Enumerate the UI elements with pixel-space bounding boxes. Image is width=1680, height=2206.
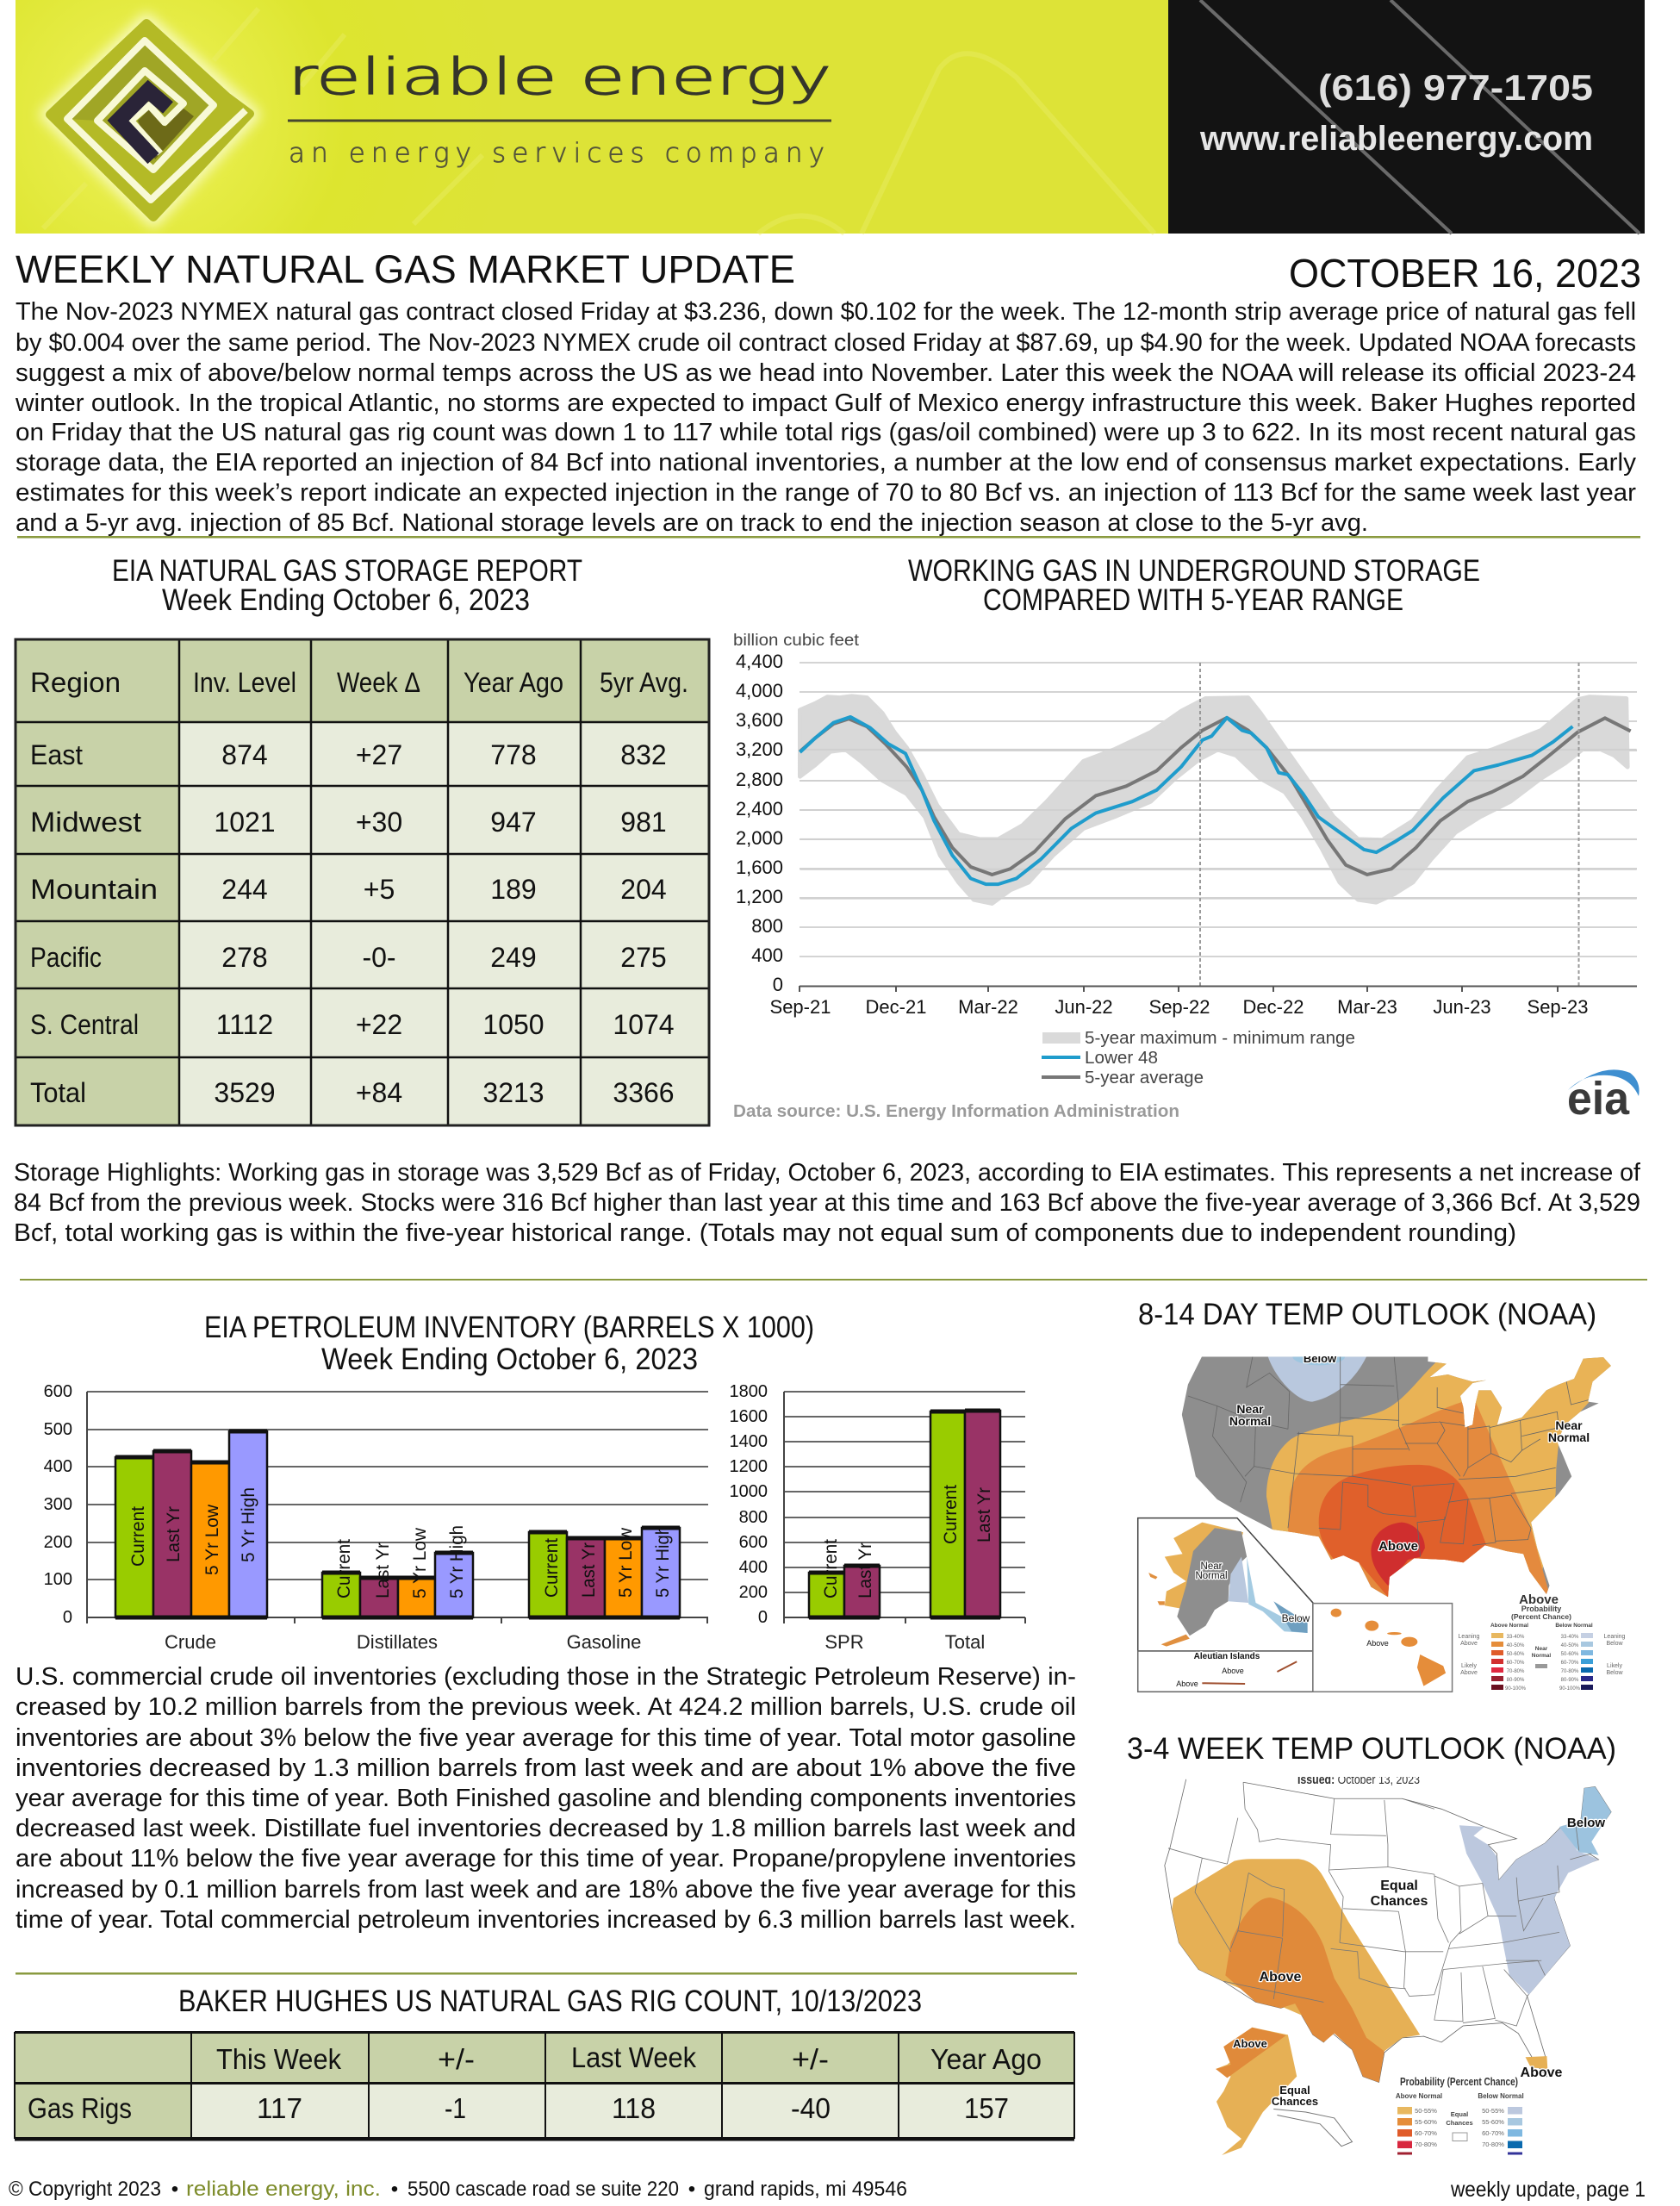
storage table: 832 [620, 739, 667, 770]
map legend: 70-80% [1415, 2141, 1437, 2148]
heading: working gas chart: COMPARED WITH 5-YEAR RANGE [983, 583, 1403, 617]
map legend: 50-55% [1482, 2107, 1504, 2115]
y axis labels: 100 [44, 1570, 72, 1589]
footer: page label: weekly update, page 1 [1450, 2178, 1646, 2202]
map legend: 80-90% [1507, 1678, 1525, 1683]
map labels: Above [1378, 1539, 1418, 1554]
bar labels: Current [821, 1539, 841, 1598]
rig count table: +/- [792, 2043, 829, 2075]
map legend: Below [1606, 1641, 1623, 1647]
map legend: Above [1460, 1641, 1478, 1647]
chart: x axis labels: Sep-21 [770, 996, 831, 1018]
chart: y axis labels: 1,600 [736, 857, 783, 878]
footer: address line: reliable energy, inc. [186, 2178, 381, 2201]
petroleum commentary text block: time of year. Total commercial petroleum inventories increased by 6.3 million barrels last week. [16, 1906, 1076, 1934]
chart: y axis labels: 2,400 [736, 798, 783, 819]
map legend: Above [1460, 1670, 1478, 1676]
storage table: 1050 [482, 1009, 544, 1040]
chart: x axis labels: Dec-21 [866, 996, 926, 1018]
chart: x axis labels: Jun-23 [1433, 996, 1491, 1018]
category labels: SPR [824, 1631, 864, 1653]
banner: black contact panel [1168, 0, 1645, 234]
rig count table: 157 [964, 2092, 1009, 2124]
bar labels: 5 Yr Low [202, 1504, 222, 1575]
storage table: Midwest [30, 807, 141, 838]
map legend: Likely [1461, 1663, 1477, 1669]
storage table: +5 [364, 874, 395, 905]
map legend: 55-60% [1482, 2118, 1504, 2126]
heading: storage report: EIA NATURAL GAS STORAGE REPORT [112, 554, 582, 588]
y axis labels: 0 [758, 1608, 768, 1627]
icon: reliable energy spiral logo [46, 19, 254, 221]
storage table: 204 [620, 874, 667, 905]
chart: x axis labels [770, 996, 1588, 1018]
market summary text block: by $0.004 over the same period. The Nov-2023 NYMEX crude oil contract closed Friday at $87.69, up $4.90 for the week. Updated NOAA forecasts [16, 329, 1636, 357]
storage table: -0- [362, 942, 396, 973]
y axis labels: 1600 [729, 1407, 768, 1426]
y axis labels: 600 [739, 1533, 768, 1552]
y axis labels: 1400 [729, 1432, 768, 1451]
map legend: 40-50% [1507, 1643, 1525, 1648]
heading: working gas chart: WORKING GAS IN UNDERGROUND STORAGE [908, 554, 1480, 588]
map: continental US zones [1182, 1356, 1611, 1598]
storage table: 5yr Avg. [600, 667, 688, 698]
heading: storage report [112, 554, 582, 617]
map legend: Below Normal [1478, 2092, 1524, 2100]
y axis labels [729, 1382, 768, 1627]
chart: y axis labels: 400 [751, 944, 783, 966]
category labels [824, 1631, 985, 1653]
footer: address line: © Copyright 2023 [9, 2178, 161, 2201]
map legend: Chances [1446, 2119, 1473, 2127]
map: Hawaii inset [1313, 1604, 1453, 1692]
website: www.reliableenergy.com [1199, 120, 1593, 158]
y axis labels: 1000 [729, 1482, 768, 1501]
storage table: +22 [356, 1009, 402, 1040]
storage table: Region [30, 667, 121, 698]
storage table: +30 [356, 807, 402, 838]
map labels: Equal [1279, 2084, 1310, 2097]
phone number: (616) 977-1705 [1318, 67, 1593, 108]
storage highlights text block: 84 Bcf from the previous week. Stocks were 316 Bcf higher than last year at this time and 163 Bcf above the five-year average of 3,366 Bcf. At 3,529 [14, 1189, 1640, 1217]
rig count table [15, 2031, 1074, 2141]
y axis labels: 600 [44, 1382, 72, 1401]
bar labels: 5 Yr Low [616, 1527, 636, 1598]
footer: address line: grand rapids, mi 49546 [704, 2178, 907, 2201]
heading: petroleum inventory [204, 1311, 814, 1376]
petroleum commentary text block: creased by 10.2 million barrels from the previous week. At 424.2 million barrels, U.S. crude oil [16, 1693, 1076, 1721]
y axis labels: 800 [739, 1508, 768, 1527]
chart: unit label: billion cubic feet [733, 632, 860, 650]
map labels: Below [1567, 1816, 1605, 1830]
map legend: Leaning [1604, 1634, 1626, 1640]
bar chart: petroleum inventory left [44, 1382, 708, 1653]
y axis labels: 400 [739, 1558, 768, 1577]
market summary text block: estimates for this week’s report indicate an expected injection in the range of 70 to 80 Bcf vs. an injection of 113 Bcf for the same week last year [16, 479, 1636, 507]
map: Aleutian inset [1138, 1651, 1313, 1692]
y axis labels: 300 [44, 1495, 72, 1514]
chart: legend: 5-year average [1085, 1069, 1204, 1087]
bar labels [128, 1487, 673, 1598]
map legend: 70-80% [1561, 1669, 1579, 1674]
rig count table: +/- [438, 2043, 475, 2075]
bar chart: petroleum inventory right [729, 1382, 1025, 1653]
bar labels: 5 Yr Low [410, 1527, 430, 1598]
storage table: 981 [620, 807, 667, 838]
line chart: working gas in storage [733, 632, 1640, 1125]
y axis labels: 200 [44, 1533, 72, 1552]
map: continental US zones [1165, 1779, 1611, 2155]
storage table: 874 [221, 739, 268, 770]
market summary text block: on Friday that the US natural gas rig count was down 1 to 117 while total rigs (gas/oil combined) were up 3 to 622. In its most recent natural gas [16, 419, 1636, 446]
storage table: 275 [620, 942, 667, 973]
banner: yellow-green panel [16, 0, 1168, 234]
map: Alaska inset [1138, 1518, 1313, 1651]
map legend: Equal [1451, 2110, 1468, 2118]
y axis labels: 0 [63, 1608, 72, 1627]
map legend: 60-70% [1561, 1661, 1579, 1666]
map: insets [1138, 1518, 1453, 1692]
map legend: Probability [1521, 1605, 1561, 1613]
map legend [1396, 2076, 1524, 2154]
map legend: 90-100% [1559, 1686, 1581, 1692]
storage table [16, 639, 709, 1125]
bar labels: 5 Yr High [653, 1525, 673, 1598]
map legend: Likely [1607, 1663, 1622, 1669]
title: WEEKLY NATURAL GAS MARKET UPDATE [16, 247, 795, 291]
storage table: 249 [490, 942, 537, 973]
category labels: Gasoline [567, 1631, 641, 1653]
map labels: Normal [1195, 1571, 1228, 1581]
storage table: S. Central [30, 1009, 139, 1040]
map legend: 70-80% [1482, 2141, 1504, 2148]
storage table: +27 [356, 739, 402, 770]
footer: address line: • [391, 2178, 398, 2201]
y axis labels: 200 [739, 1583, 768, 1602]
storage table: 3366 [613, 1077, 675, 1108]
map labels: Above [1222, 1667, 1244, 1675]
storage highlights text block: Storage Highlights: Working gas in storage was 3,529 Bcf as of Friday, October 6, 2023, according to EIA estimates. This represents a net increase of [14, 1159, 1641, 1187]
rig count table: 117 [257, 2092, 302, 2124]
storage table: East [30, 739, 83, 770]
storage table: 3529 [214, 1077, 276, 1108]
storage highlights text block: Bcf, total working gas is within the five-year historical range. (Totals may not equal sum of components due to independent rounding) [14, 1219, 1516, 1247]
market summary text block: storage data, the EIA reported an injection of 84 Bcf into national inventories, a number at the low end of consensus market expectations. Early [16, 449, 1637, 477]
y axis labels: 1800 [729, 1382, 768, 1401]
bars: crude [115, 1431, 267, 1617]
map labels: Above [1260, 1970, 1302, 1985]
map: 8-14 day temperature outlook [1138, 1348, 1629, 1692]
chart: x axis labels: Sep-22 [1149, 996, 1210, 1018]
footer: address line: 5500 cascade road se suite 220 [408, 2178, 679, 2201]
chart: data curves [800, 696, 1637, 903]
rig count table: Last Week [571, 2041, 696, 2073]
chart: y axis labels: 4,000 [736, 680, 783, 701]
map legend: 33-40% [1561, 1635, 1579, 1640]
map legend: Above Normal [1396, 2092, 1442, 2100]
petroleum commentary text block: inventories decreased by 1.3 million barrels from last week and are about 1% above the five [16, 1754, 1076, 1782]
market summary text block: winter outlook. In the tropical Atlantic, no storms are expected to impact Gulf of Mexico energy infrastructure this week. Baker Hughes reported [15, 389, 1636, 417]
map: 3-4 week temperature outlook [1165, 1773, 1611, 2155]
storage table: Total [30, 1077, 86, 1108]
map labels: Above [1521, 2066, 1563, 2080]
chart: y axis labels: 4,400 [736, 651, 783, 672]
storage table: Inv. Level [193, 667, 296, 698]
map labels: Below [1304, 1352, 1337, 1365]
map legend: Near [1535, 1646, 1548, 1652]
map legend: 40-50% [1561, 1643, 1579, 1648]
heading: 3-4 week outlook: 3-4 WEEK TEMP OUTLOOK (NOAA) [1127, 1732, 1616, 1766]
heading: rig count: BAKER HUGHES US NATURAL GAS RIG COUNT, 10/13/2023 [178, 1985, 922, 2018]
storage table: 189 [490, 874, 537, 905]
petroleum commentary text block: are about 11% below the five year average for this time of year. Propane/propylene inventories [16, 1845, 1076, 1873]
y axis labels [44, 1382, 72, 1627]
heading: 8-14 day outlook: 8-14 DAY TEMP OUTLOOK (NOAA) [1138, 1298, 1596, 1331]
market summary text block: and a 5-yr avg. injection of 85 Bcf. National storage levels are on track to end the injection season at close to the 5-yr avg. [16, 509, 1368, 537]
category labels: Distillates [357, 1631, 438, 1653]
map labels: Above [1176, 1679, 1198, 1688]
bars: distillates [322, 1553, 473, 1617]
map legend: Leaning [1459, 1634, 1480, 1640]
storage table: 1112 [216, 1009, 273, 1040]
rig count table: -40 [791, 2092, 831, 2124]
chart: y axis labels: 0 [773, 974, 783, 995]
bar labels: 5 Yr High [239, 1487, 258, 1562]
chart: y axis labels: 3,200 [736, 738, 783, 760]
map legend: 60-70% [1482, 2129, 1504, 2137]
map labels: Chances [1272, 2095, 1318, 2108]
map legend: 70-80% [1507, 1669, 1525, 1674]
map labels: Near [1201, 1561, 1223, 1572]
bar labels: Current [542, 1538, 562, 1598]
rig count table: 118 [612, 2092, 656, 2124]
storage table: Week Δ [337, 667, 420, 698]
chart: y axis labels: 800 [751, 915, 783, 937]
heading: petroleum inventory: EIA PETROLEUM INVENTORY (BARRELS X 1000) [204, 1311, 814, 1344]
date: OCTOBER 16, 2023 [1289, 251, 1641, 296]
map legend [1459, 1592, 1626, 1692]
bar labels: Current [128, 1506, 148, 1567]
rig count table: Gas Rigs [28, 2092, 132, 2124]
bar labels: 5 Yr High [447, 1525, 467, 1598]
map legend: 33-40% [1507, 1635, 1525, 1640]
footer: address line [9, 2178, 907, 2201]
map labels [1233, 1816, 1605, 2108]
map legend: Normal [1532, 1653, 1551, 1659]
chart: data source: Data source: U.S. Energy Information Administration [733, 1102, 1179, 1121]
petroleum commentary text block: year average for this time of year. Both Finished gasoline and blending components inventories [16, 1785, 1076, 1812]
storage table: 278 [221, 942, 268, 973]
petroleum commentary text block: inventories are about 3% below the five year average for this time of year. Total motor gasoline [16, 1724, 1076, 1752]
storage table: 947 [490, 807, 537, 838]
map labels: Normal [1229, 1414, 1271, 1428]
chart: legend [1042, 1029, 1355, 1087]
bar labels [821, 1485, 994, 1598]
chart: y axis labels: 1,200 [736, 886, 783, 907]
map legend: Above [1519, 1592, 1559, 1607]
chart: x axis labels: Jun-22 [1055, 996, 1113, 1018]
bar labels: Last Yr [974, 1487, 994, 1542]
storage table: 1074 [613, 1009, 675, 1040]
chart: x axis labels: Mar-23 [1337, 996, 1397, 1018]
bar labels: Last Yr [579, 1542, 599, 1598]
map labels: Near [1236, 1402, 1264, 1416]
map labels: Above [1233, 2037, 1267, 2050]
category labels [165, 1631, 641, 1653]
chart: x axis labels: Mar-22 [958, 996, 1018, 1018]
map legend: 50-55% [1415, 2107, 1437, 2115]
icon: eia logo: eia [1567, 1073, 1630, 1125]
storage table: 1021 [214, 807, 276, 838]
chart: y axis labels: 2,000 [736, 827, 783, 849]
y axis labels: 1200 [729, 1457, 768, 1476]
petroleum commentary text block: U.S. commercial crude oil inventories (excluding those in the Strategic Petroleum Reserve) in- [16, 1663, 1076, 1691]
tagline: an energy services company [289, 138, 824, 169]
market summary text block: suggest a mix of above/below normal temps across the US as we head into November. Later this week the NOAA will release its official 2023-24 [16, 359, 1636, 387]
storage table: Mountain [30, 874, 158, 905]
storage table: 778 [490, 739, 537, 770]
storage table: 244 [221, 874, 268, 905]
chart: y axis labels: 3,600 [736, 709, 783, 731]
map legend: Probability (Percent Chance) [1400, 2076, 1518, 2088]
storage table: 3213 [482, 1077, 544, 1108]
bars: SPR and total [809, 1411, 1000, 1617]
category labels: Crude [165, 1631, 216, 1653]
petroleum commentary text block: increased by 0.1 million barrels from last week and are 18% above the five year average for this [16, 1876, 1076, 1904]
bars: gasoline [529, 1528, 680, 1617]
storage table: Year Ago [464, 667, 563, 698]
chart: legend: 5-year maximum - minimum range [1085, 1029, 1355, 1048]
heading: storage report: Week Ending October 6, 2023 [162, 583, 530, 617]
bar labels: Current [334, 1539, 354, 1598]
chart: x axis labels: Dec-22 [1243, 996, 1304, 1018]
map legend: 55-60% [1415, 2118, 1437, 2126]
bar labels: Last Yr [856, 1542, 875, 1598]
bar labels: Last Yr [164, 1506, 184, 1562]
chart: legend: Lower 48 [1085, 1049, 1158, 1068]
company name: reliable energy [288, 47, 831, 106]
market summary text block [15, 298, 1637, 537]
storage table: Pacific [30, 942, 102, 973]
map legend: (Percent Chance) [1511, 1612, 1571, 1621]
bar labels: Last Yr [373, 1542, 393, 1598]
rig count table: This Week [216, 2043, 341, 2075]
storage table: +84 [356, 1077, 402, 1108]
map labels: Below [1282, 1612, 1310, 1624]
category labels: Total [945, 1631, 985, 1653]
chart: x axis labels: Sep-23 [1528, 996, 1588, 1018]
map legend: 50-60% [1561, 1652, 1579, 1657]
chart: y axis labels: 2,800 [736, 769, 783, 790]
map legend: 50-60% [1507, 1652, 1525, 1657]
footer: address line: • [171, 2178, 178, 2201]
rig count table: -1 [445, 2092, 466, 2124]
rig count table: Year Ago [930, 2043, 1042, 2075]
heading: petroleum inventory: Week Ending October 6, 2023 [321, 1343, 698, 1376]
y axis labels: 400 [44, 1457, 72, 1476]
market summary text block: The Nov-2023 NYMEX natural gas contract closed Friday at $3.236, down $0.102 for the week. The 12-month strip average price of natural gas fell [16, 298, 1636, 326]
footer: address line: • [688, 2178, 695, 2201]
map legend: 60-70% [1415, 2129, 1437, 2137]
map legend: 60-70% [1507, 1661, 1525, 1666]
petroleum commentary text block: decreased last week. Distillate fuel inventories decreased by 1.8 million barrels last week and [16, 1815, 1076, 1842]
map legend: Above Normal [1490, 1623, 1528, 1629]
chart: y axis labels [736, 651, 783, 995]
map labels: Chances [1371, 1894, 1428, 1909]
map labels: Normal [1548, 1430, 1590, 1444]
petroleum commentary text block [16, 1663, 1076, 1934]
map: Alaska [1216, 2028, 1297, 2155]
map legend: Below Normal [1555, 1623, 1593, 1629]
map legend: 80-90% [1561, 1678, 1579, 1683]
storage highlights text block [14, 1159, 1641, 1247]
map labels [1176, 1352, 1590, 1688]
heading: working gas chart [908, 554, 1480, 617]
map labels: Aleutian Islands [1194, 1652, 1260, 1661]
header banner [16, 0, 1645, 234]
y axis labels: 500 [44, 1420, 72, 1439]
map: issue date: Issued: October 13, 2023 [1297, 1773, 1420, 1787]
map labels: Above [1366, 1639, 1389, 1648]
map labels: Equal [1380, 1879, 1418, 1893]
map labels: Near [1555, 1418, 1583, 1432]
bar labels: Current [941, 1485, 961, 1544]
map legend: 90-100% [1505, 1686, 1527, 1692]
map legend: Below [1606, 1670, 1623, 1676]
